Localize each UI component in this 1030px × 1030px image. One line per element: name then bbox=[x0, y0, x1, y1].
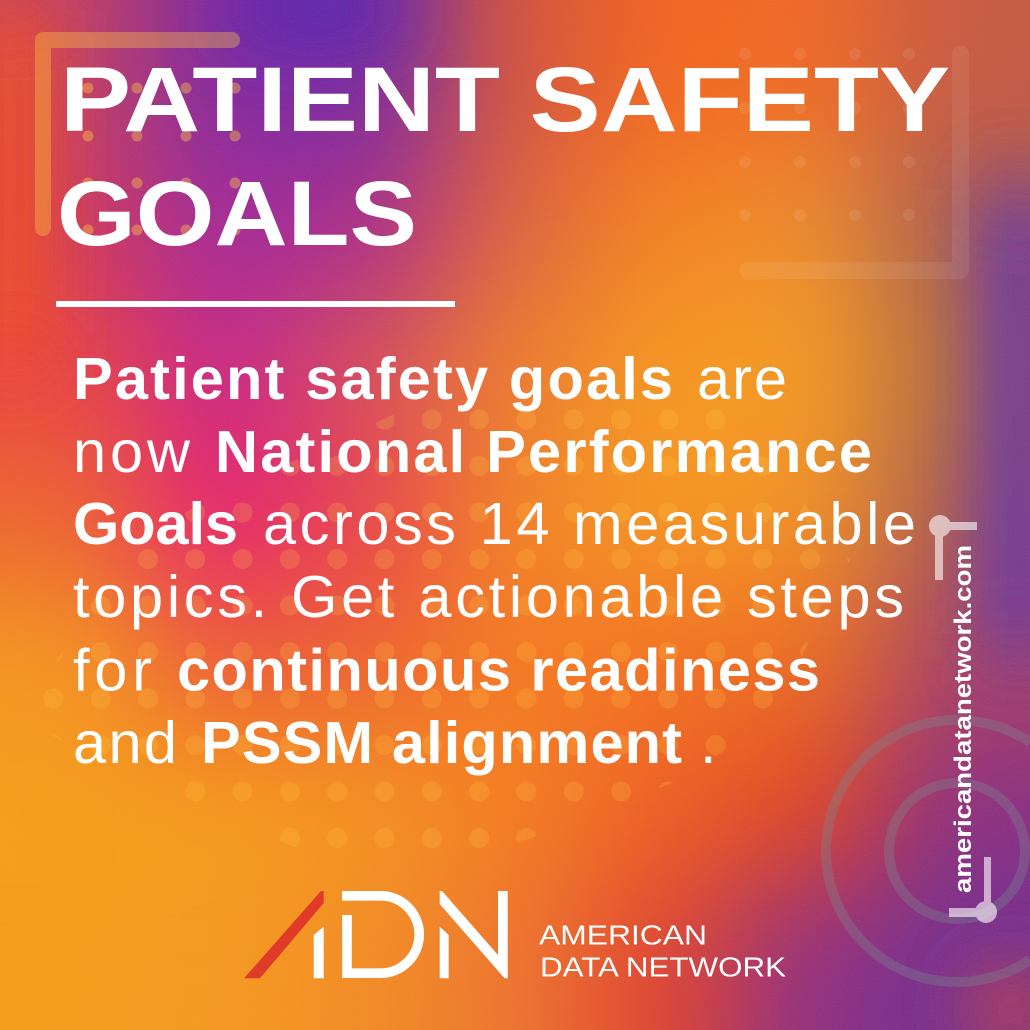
body paragraph: Goals bbox=[73, 490, 238, 557]
body paragraph: . bbox=[700, 709, 717, 776]
logo: ADN mark bbox=[244, 891, 508, 978]
body paragraph bbox=[73, 345, 916, 776]
bracket: top left bbox=[43, 40, 232, 228]
logo: wordmark bbox=[539, 919, 787, 982]
body paragraph: topics. Get actionable steps bbox=[73, 563, 904, 630]
body paragraph: Patient safety goals bbox=[73, 345, 673, 412]
body paragraph: and bbox=[73, 709, 177, 776]
decorative dots: top right bbox=[739, 48, 915, 221]
bracket: bottom right bbox=[748, 54, 960, 270]
logo: wordmark: DATA NETWORK bbox=[540, 951, 787, 982]
body paragraph: now bbox=[73, 418, 191, 485]
title bbox=[57, 49, 950, 265]
website url: americandatanetwork.com bbox=[950, 545, 977, 893]
body paragraph: across 14 measurable bbox=[263, 490, 916, 557]
body paragraph: for bbox=[73, 636, 152, 704]
decorative dot field: centre bbox=[40, 400, 850, 850]
logo: wordmark: AMERICAN bbox=[539, 919, 707, 950]
concentric circles bbox=[826, 720, 1030, 982]
title: GOALS bbox=[57, 163, 417, 265]
body paragraph: PSSM alignment bbox=[201, 709, 682, 776]
body paragraph: are bbox=[697, 345, 787, 412]
decorative dots: top left bbox=[82, 82, 240, 236]
connector icon: top bbox=[929, 515, 977, 580]
body paragraph: National Performance bbox=[215, 418, 872, 485]
divider under title bbox=[56, 301, 455, 307]
connector icon: bottom bbox=[949, 857, 997, 923]
body paragraph: continuous readiness bbox=[177, 636, 820, 704]
title: PATIENT SAFETY bbox=[60, 49, 950, 151]
